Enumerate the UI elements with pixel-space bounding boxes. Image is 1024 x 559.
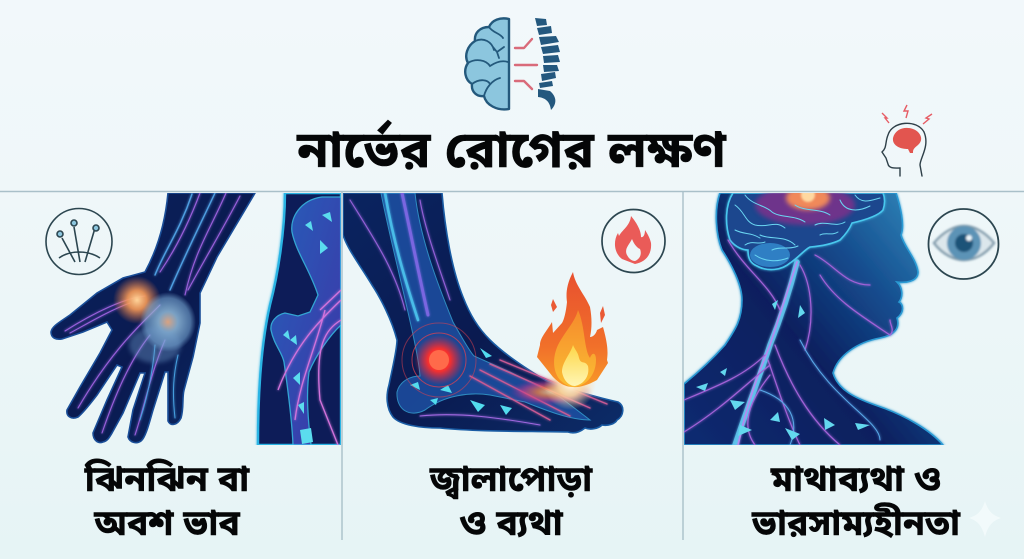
icon: needles circle (46, 208, 112, 274)
panel: headache and imbalance (684, 185, 998, 445)
label: burning and pain: ও ব্যথা (459, 503, 564, 543)
icon: brain and spine (465, 18, 560, 110)
label: burning and pain (429, 459, 593, 543)
illustration: head and neck with nerves (684, 185, 943, 445)
label: tingling or numbness (84, 458, 250, 543)
panel dividers (0, 192, 1024, 540)
icon: flame circle (602, 210, 665, 272)
icon: head with brain and pain bolts (882, 105, 932, 176)
panel: tingling and numbness (46, 193, 341, 445)
label: headache and imbalance: ভারসাম্যহীনতা (751, 502, 961, 543)
label: burning and pain: জ্বালাপোড়া (429, 459, 593, 499)
title: নার্ভের রোগের লক্ষণ (296, 120, 726, 178)
icon: sparkle watermark (969, 501, 1001, 537)
illustration: foot with nerves (343, 193, 623, 433)
illustration: hand with nerves (51, 193, 255, 443)
panel: burning and pain (343, 193, 665, 433)
icon: blurred eye circle (928, 209, 998, 279)
label: tingling or numbness: অবশ ভাব (93, 503, 240, 543)
label: tingling or numbness: ঝিনঝিন বা (84, 458, 250, 499)
illustration: hip and thigh bone (258, 193, 341, 445)
label: headache and imbalance: মাথাব্যথা ও (770, 459, 941, 499)
illustration: large flame (537, 272, 608, 410)
label: headache and imbalance (751, 459, 961, 543)
